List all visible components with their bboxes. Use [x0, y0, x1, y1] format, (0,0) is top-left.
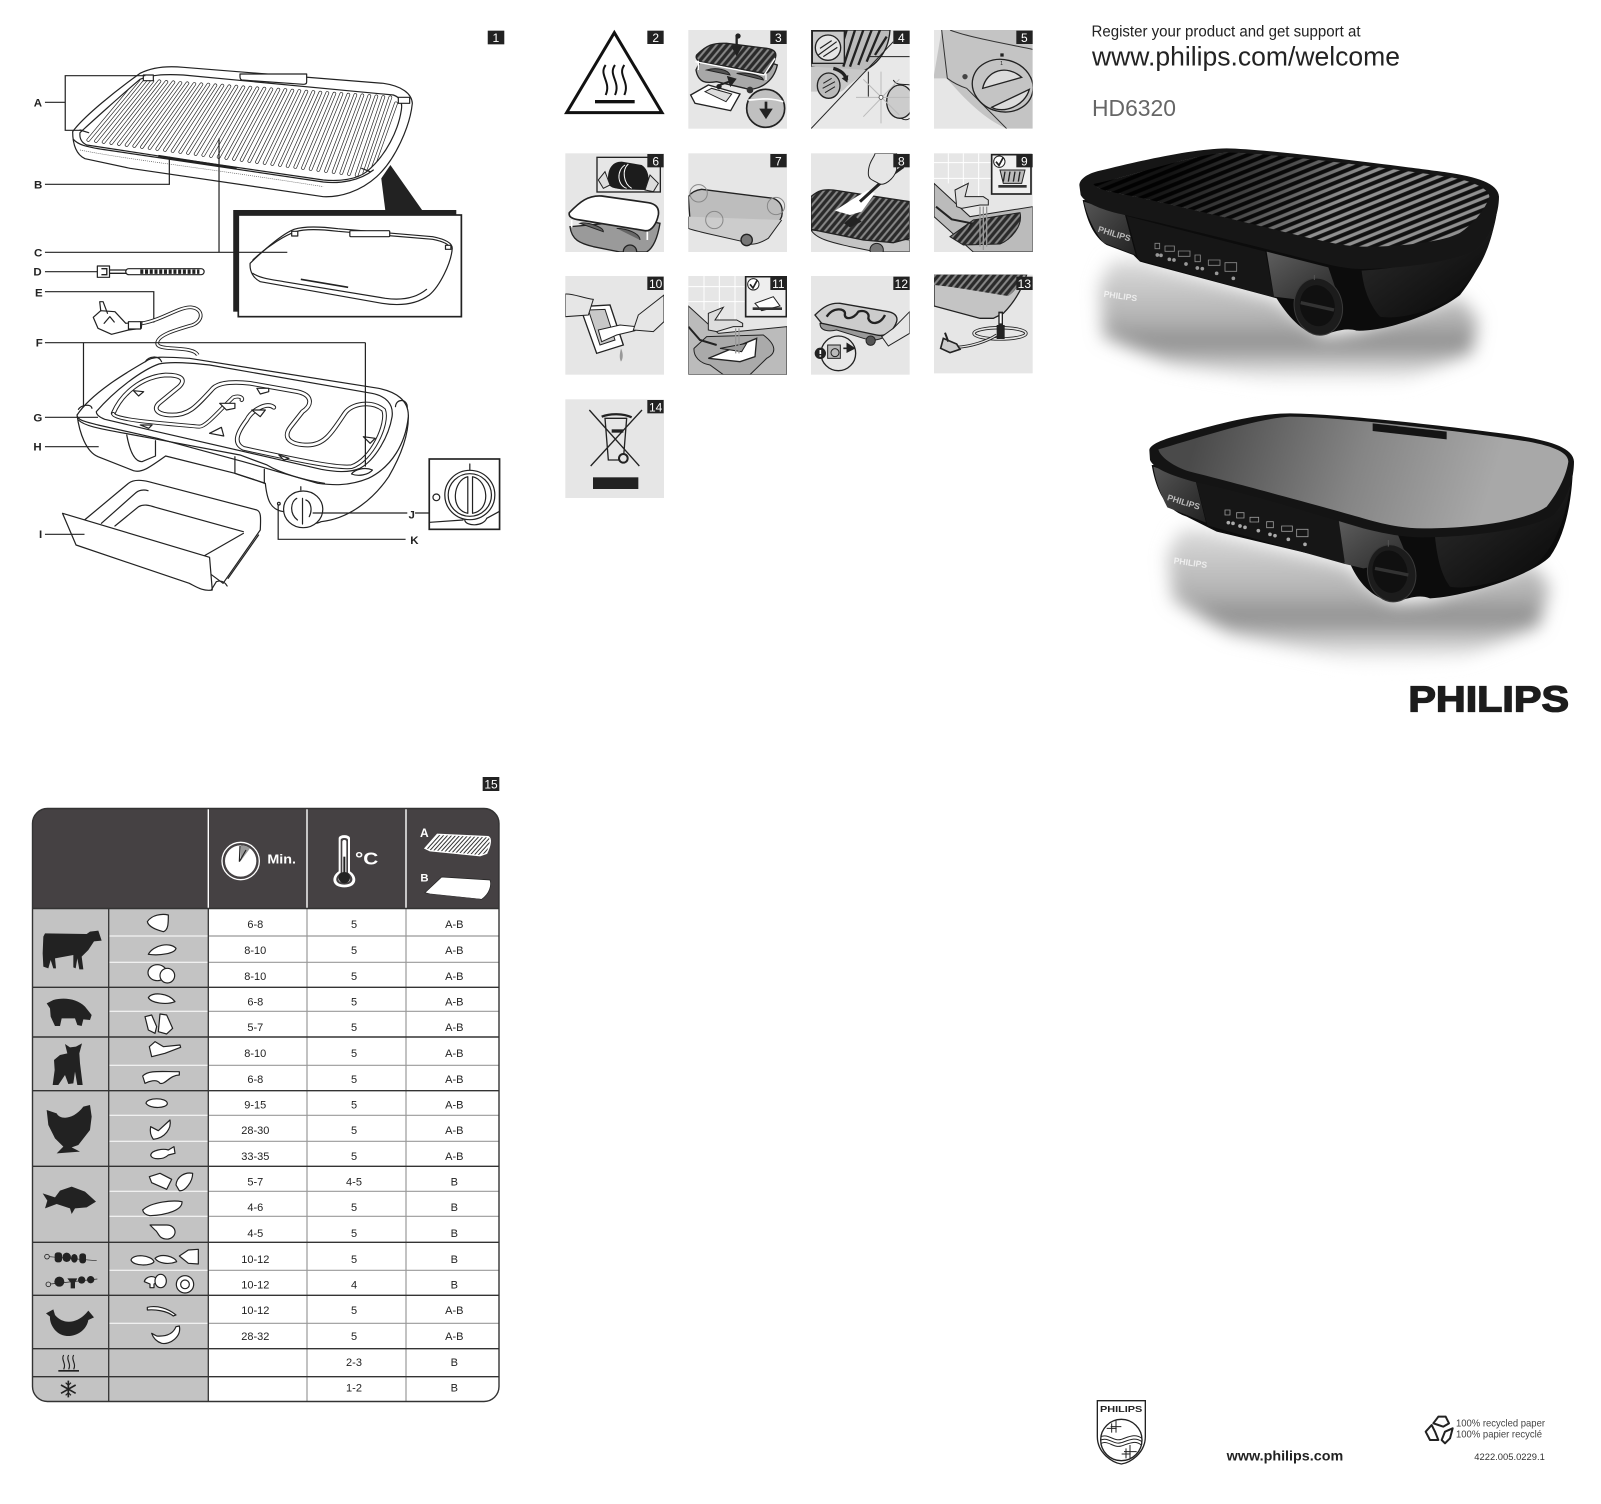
table values: 5: [351, 945, 357, 957]
icon: fish fillets: [149, 1173, 193, 1191]
table values: 4-5: [346, 1176, 362, 1188]
footer: recycled paper text: 100% papier recyclé: [1456, 1429, 1542, 1441]
table values: 6-8: [247, 1074, 263, 1086]
power cord: [142, 307, 201, 355]
table values: A-B: [445, 1022, 463, 1034]
table values: B: [451, 1382, 458, 1394]
step 5: dial closeup: 1: [1000, 61, 1003, 67]
table values: 5: [351, 1100, 357, 1112]
reflection: [1167, 528, 1550, 663]
table values: 5: [351, 1254, 357, 1266]
base body: [77, 357, 408, 523]
icon: drumstick: [151, 1147, 175, 1159]
step 10: clean drawer: [565, 276, 664, 375]
table values: 5: [351, 996, 357, 1008]
label F: F: [36, 338, 43, 350]
model number: HD6320: [1092, 95, 1176, 121]
table values: A-B: [445, 1305, 463, 1317]
product photo: flat plate grill: [1149, 413, 1574, 720]
body: PHILIPS: [1097, 224, 1132, 243]
label J and K: K: [410, 535, 419, 547]
step 8: spatula on grill: [811, 153, 910, 257]
step 2: hot surface warning: [567, 31, 664, 113]
table values: 4-6: [247, 1202, 263, 1214]
table values: 1-2: [346, 1382, 362, 1394]
table values: A-B: [445, 971, 463, 983]
step 7: check plate corners: 7: [775, 154, 782, 168]
grill plate illustration: [73, 67, 412, 197]
label C: [34, 138, 287, 259]
icon: lamb: [53, 1043, 83, 1085]
table grid: [32, 808, 500, 1402]
icon: shrimp: [150, 1225, 175, 1239]
step 11: wash drawer: 11: [772, 277, 785, 291]
step 3: assemble: [688, 30, 787, 129]
icon: beef cut 1: [147, 914, 168, 932]
registration text: www.philips.com/welcome: [1091, 42, 1400, 72]
icon: thermometer: °C: [355, 849, 379, 869]
inset shadow and wedge: [233, 165, 456, 312]
step 2: hot surface warning: 2: [652, 31, 659, 45]
footer: document code: 4222.005.0229.1: [1474, 1452, 1545, 1463]
panel 15: cooking table: [32, 777, 500, 1402]
icon: plate B flat: [420, 872, 491, 899]
step 14: WEEE recycling bin: 14: [649, 400, 663, 414]
icon: meat skewer: [45, 1252, 97, 1263]
header icons and upper food icons: [43, 826, 491, 1085]
icon: clock: Min.: [267, 852, 296, 867]
icon: plate A ribbed: A: [420, 826, 429, 840]
panel icons: [1155, 243, 1237, 280]
panel: step illustrations row 1 and 2: [565, 30, 1039, 258]
step 5: dial closeup: 5: [1021, 31, 1028, 45]
icon: skewer meats: [131, 1249, 198, 1265]
label B: B: [34, 179, 42, 191]
label C: C: [34, 247, 42, 259]
label I: I: [39, 529, 42, 541]
reflection: PHILIPS: [1173, 555, 1208, 570]
table values: 4-5: [247, 1228, 263, 1240]
table values: 5: [351, 1331, 357, 1343]
table values: 6-8: [247, 996, 263, 1008]
rim: [1149, 413, 1574, 537]
flat plate surface: [1158, 417, 1568, 528]
lower food icons: [43, 1071, 198, 1397]
panel 1: parts diagram upper: [33, 31, 504, 355]
body: [1152, 465, 1573, 602]
inset box with smooth plate: [238, 215, 461, 317]
icon: clock: [222, 842, 296, 880]
table outline: [32, 808, 499, 1402]
reflection: PHILIPS: [1103, 289, 1138, 303]
label G: [33, 412, 98, 424]
table values: A-B: [445, 1125, 463, 1137]
panel 1: base and drawer diagram: [33, 343, 500, 590]
table values: 5: [351, 919, 357, 931]
table values: 28-30: [241, 1125, 269, 1137]
table values: 33-35: [241, 1151, 269, 1163]
ribbed surface: [1093, 153, 1489, 247]
table values: B: [451, 1202, 458, 1214]
icon: sausage silhouette: [46, 1309, 94, 1336]
footer: shield logo: [1097, 1401, 1145, 1464]
badge 1: 1: [492, 31, 500, 45]
plug: [93, 302, 142, 334]
icon: chicken: [47, 1105, 92, 1153]
table values: 5: [351, 1074, 357, 1086]
table values: 4: [351, 1280, 357, 1292]
knob: [1362, 540, 1421, 606]
icon: pork cut: [148, 994, 175, 1003]
table values: A-B: [445, 1074, 463, 1086]
table values: B: [451, 1357, 458, 1369]
body: PHILIPS: [1166, 492, 1201, 512]
table values: B: [451, 1176, 458, 1188]
table values: 5: [351, 1048, 357, 1060]
table values: A-B: [445, 919, 463, 931]
icon: heat: [58, 1355, 79, 1372]
icon: lamb leg: [149, 1042, 181, 1057]
control knob: [277, 487, 323, 528]
table values: 5-7: [247, 1022, 263, 1034]
body: [1083, 200, 1497, 335]
icon: snowflake: [61, 1381, 76, 1397]
step 4: turn knob: [811, 30, 913, 129]
step 3: assemble: 3: [775, 31, 782, 45]
table values: 5: [351, 1022, 357, 1034]
table values: 10-12: [241, 1254, 269, 1266]
label A: [34, 76, 145, 130]
icon: plate A ribbed: [420, 826, 490, 856]
table values: 8-10: [244, 1048, 266, 1060]
footer: shield logo: PHILIPS: [1100, 1404, 1143, 1414]
icon: plate B flat: B: [420, 872, 429, 884]
panel: step illustrations row 3 and 4: [565, 275, 1033, 498]
label A: A: [34, 97, 42, 109]
label H: [33, 442, 99, 454]
step 9: wash plate: 9: [1021, 154, 1028, 168]
dial inset: [429, 459, 500, 529]
step 9: wash plate: [934, 153, 1033, 252]
step 10: clean drawer: 10: [649, 277, 663, 291]
table values: 5: [351, 1125, 357, 1137]
icon: beef patties: [148, 965, 175, 983]
table values: B: [451, 1280, 458, 1292]
table values: 10-12: [241, 1280, 269, 1292]
step 13: cord storage: 13: [1018, 277, 1031, 291]
step 12: unplug warning: [811, 276, 910, 375]
label E: E: [35, 287, 43, 299]
footer: recycled paper text: 100% recycled paper: [1456, 1418, 1545, 1430]
drip tray: [63, 480, 261, 590]
F leader drops: [83, 343, 365, 467]
table values: 8-10: [244, 971, 266, 983]
label D and cord strap: [33, 266, 204, 279]
registration text: Register your product and get support at: [1092, 24, 1361, 41]
table values: 5: [351, 1228, 357, 1240]
icon: chicken fillet: [146, 1099, 167, 1107]
icon: beef cut 2: [148, 945, 176, 955]
knob: [1289, 274, 1348, 340]
table values: 5: [351, 1305, 357, 1317]
reflection: [1099, 259, 1478, 387]
table values: A-B: [445, 1048, 463, 1060]
icon: sausage ring: [152, 1326, 180, 1344]
registration text: [1091, 24, 1400, 72]
icon: sausage: [147, 1307, 176, 1316]
table values: [241, 919, 463, 1394]
table values: A-B: [445, 1151, 463, 1163]
step 6: place plate: 6: [652, 154, 659, 168]
step 13: cord storage: [934, 275, 1033, 373]
heating element: [113, 375, 385, 467]
table values: 8-10: [244, 945, 266, 957]
step 6: place plate: [565, 153, 664, 258]
icon: skewer vegetables: [144, 1274, 194, 1293]
label J and K: [278, 505, 429, 547]
footer: recycled paper text: [1456, 1418, 1545, 1441]
product photo: ribbed grill: [1079, 148, 1499, 387]
label H: H: [33, 442, 42, 454]
step 11: wash drawer: [688, 276, 787, 375]
table values: 5: [351, 1151, 357, 1163]
label G: G: [33, 412, 42, 424]
table values: 5: [351, 1202, 357, 1214]
table values: A-B: [445, 996, 463, 1008]
step 12: unplug warning: 12: [895, 277, 908, 291]
icon: cow: [43, 931, 102, 969]
table values: 10-12: [241, 1305, 269, 1317]
label D and cord strap: D: [33, 267, 42, 279]
icon: chicken wing: [150, 1120, 170, 1139]
PHILIPS wordmark: PHILIPS: [1408, 679, 1569, 720]
step 8: spatula on grill: 8: [898, 154, 905, 168]
step 4: turn knob: 4: [898, 31, 905, 45]
icon: fish: [43, 1187, 96, 1214]
icon: vegetable skewer: [46, 1276, 97, 1288]
badge 15: 15: [484, 777, 498, 791]
label B: [34, 157, 169, 191]
rim: [1079, 148, 1499, 269]
icon: pork chops: [145, 1014, 173, 1034]
step 7: check plate corners: [688, 153, 787, 252]
table values: 28-32: [241, 1331, 269, 1343]
label I: [39, 529, 84, 541]
table values: 5-7: [247, 1176, 263, 1188]
table values: B: [451, 1254, 458, 1266]
table values: B: [451, 1228, 458, 1240]
table values: 2-3: [346, 1357, 362, 1369]
icon: lamb chops: [143, 1071, 179, 1084]
panel icons: [1225, 510, 1308, 546]
badge 1: [488, 31, 504, 45]
step 5: dial closeup: [934, 30, 1039, 129]
table values: 5: [351, 971, 357, 983]
footer: website: www.philips.com: [1226, 1449, 1343, 1464]
label E: [35, 287, 154, 323]
table values: A-B: [445, 1100, 463, 1112]
step 14: WEEE recycling bin: [565, 399, 664, 498]
table values: 6-8: [247, 919, 263, 931]
table values: A-B: [445, 945, 463, 957]
icon: thermometer: [334, 836, 379, 887]
footer: recycling mark: [1426, 1417, 1453, 1443]
table values: 9-15: [244, 1100, 266, 1112]
icon: fish steak: [143, 1201, 182, 1216]
icon: pig: [47, 999, 92, 1026]
label J and K: J: [408, 509, 415, 521]
table values: A-B: [445, 1331, 463, 1343]
